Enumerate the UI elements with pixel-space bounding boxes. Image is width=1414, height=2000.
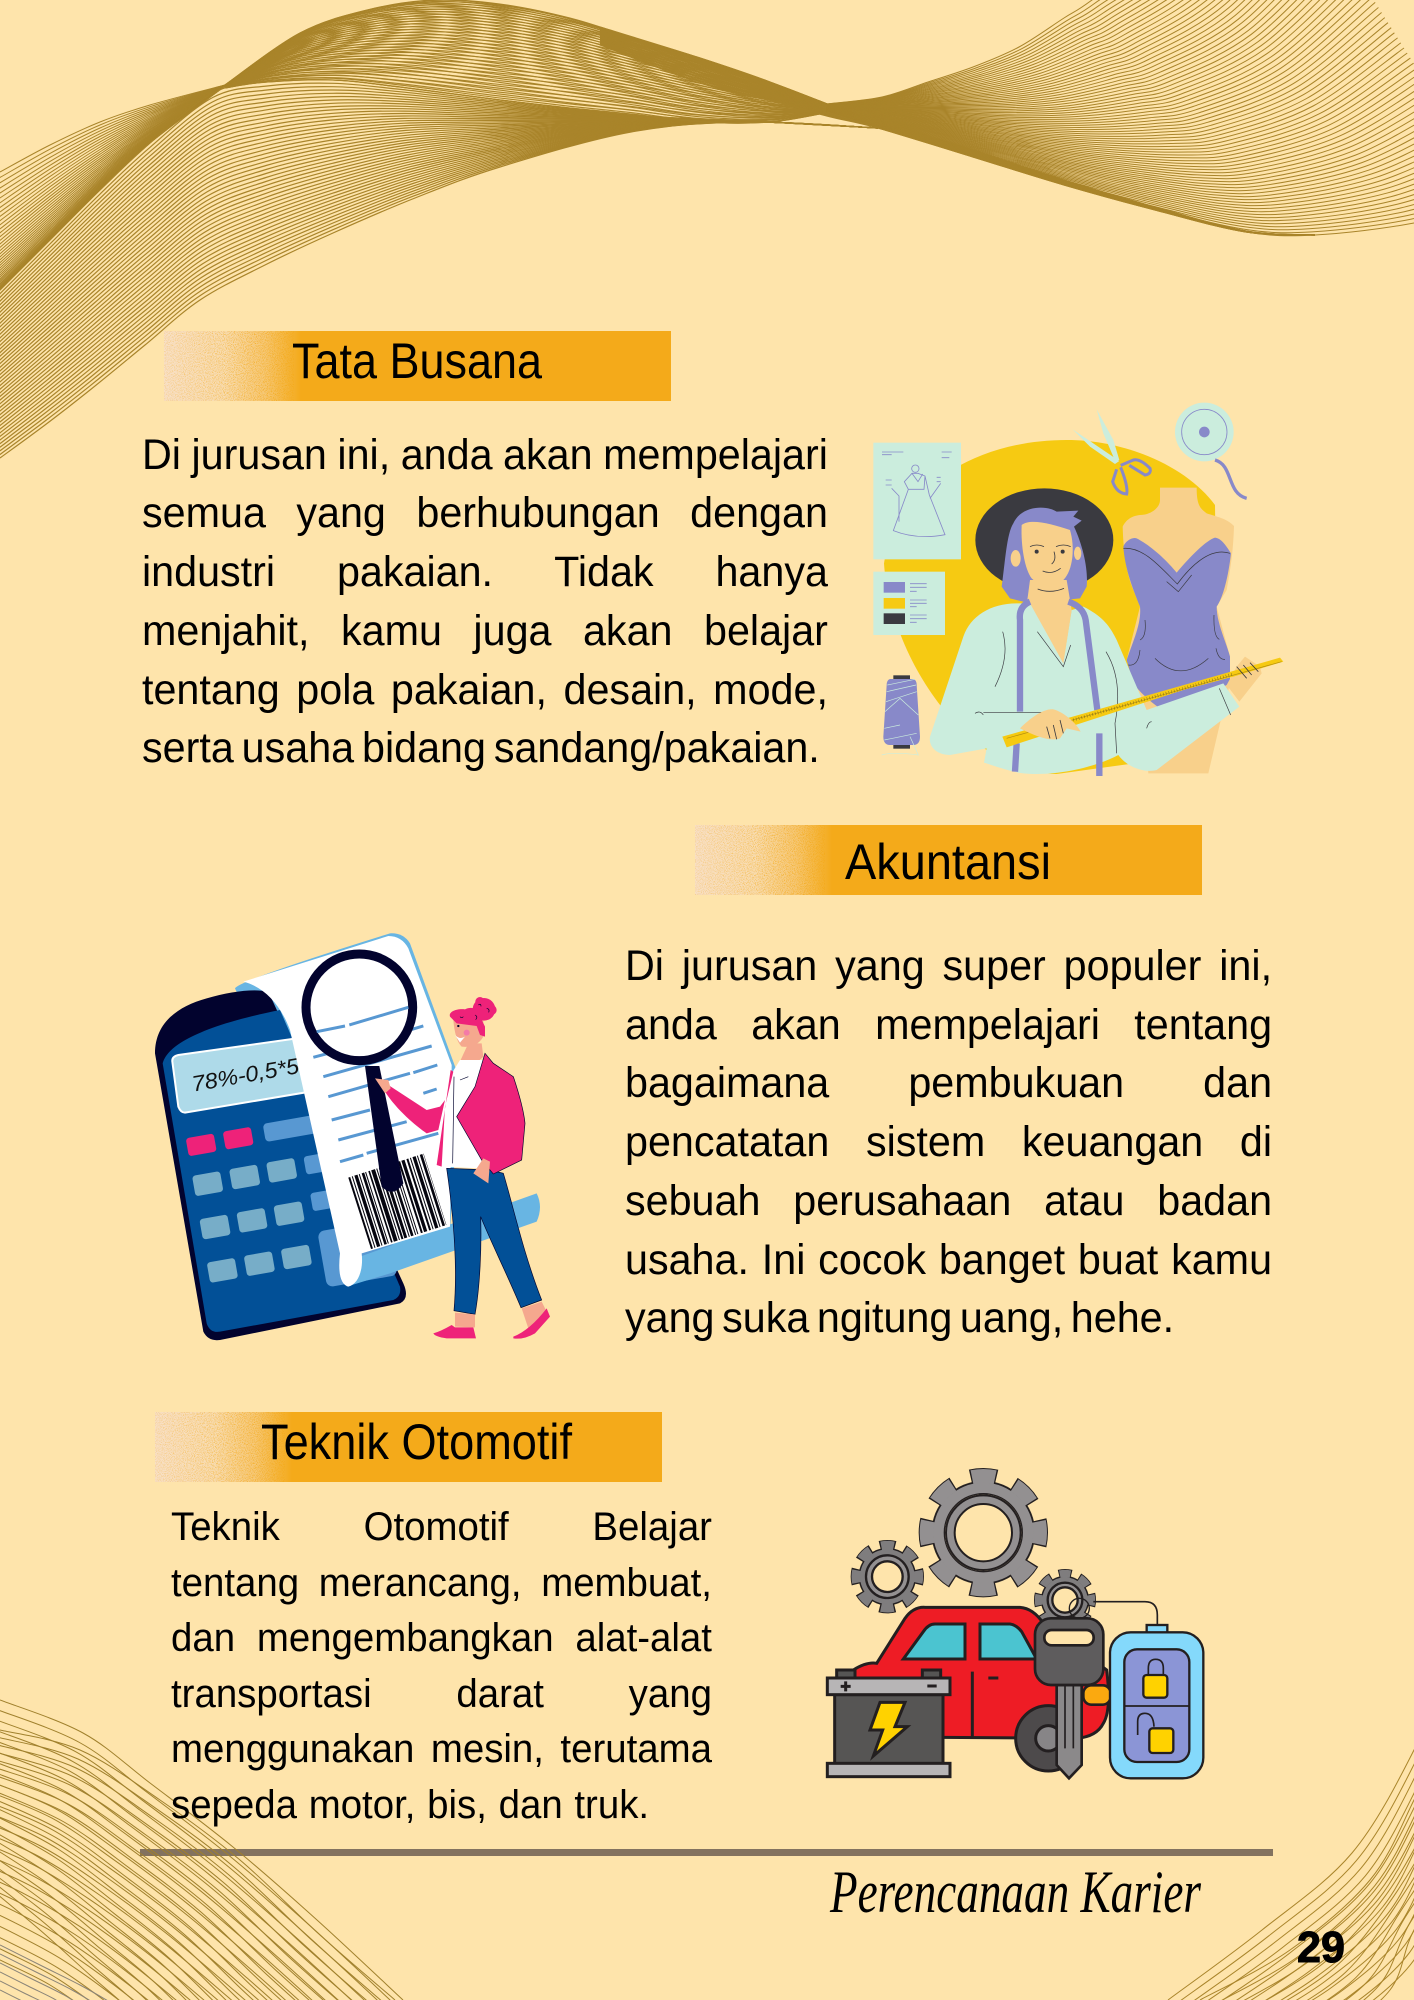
icon: large gear	[927, 1476, 1040, 1589]
text block: Tata Busana description: tentang pola pakaian, desain, mode,	[142, 666, 828, 714]
text block: Teknik Otomotif description: Teknik Otomotif Belajar	[171, 1505, 712, 1549]
icon: right gear	[1039, 1574, 1091, 1626]
footer title: Perencanaan Karier: Perencanaan Karier	[829, 1859, 1201, 1925]
icon: red car	[853, 1607, 1111, 1771]
text block: Akuntansi description: usaha. Ini cocok banget buat kamu	[625, 1236, 1272, 1284]
heading: Teknik Otomotif: Teknik Otomotif	[261, 1414, 572, 1470]
heading: Tata Busana	[164, 331, 671, 401]
icon: car battery	[827, 1670, 950, 1777]
text block: Akuntansi description	[625, 942, 1272, 1342]
text block: Tata Busana description: menjahit, kamu juga akan belajar	[142, 607, 828, 655]
text block: Teknik Otomotif description: tentang merancang, membuat,	[171, 1560, 712, 1604]
illustration: calculator, receipt and woman with magnifier: 78%-0,5*5	[190, 1053, 302, 1097]
text block: Teknik Otomotif description: sepeda motor, bis, dan truk.	[171, 1782, 649, 1826]
heading: Teknik Otomotif	[155, 1412, 662, 1482]
text block: Akuntansi description: bagaimana pembukuan dan	[625, 1059, 1272, 1107]
icon: remote with locks	[1093, 1602, 1203, 1778]
heading: Akuntansi	[695, 825, 1202, 895]
text block: Tata Busana description: industri pakaian. Tidak hanya	[142, 548, 828, 596]
icon: key	[1035, 1598, 1103, 1778]
illustration: car, battery, gears, key and remote	[827, 1476, 1203, 1778]
heading: Tata Busana: Tata Busana	[292, 333, 542, 389]
text block: Tata Busana description: semua yang berhubungan dengan	[142, 489, 828, 537]
text block: Akuntansi description: yang suka ngitung uang, hehe.	[625, 1294, 1174, 1342]
heading: Akuntansi: Akuntansi	[845, 834, 1051, 890]
text block: Tata Busana description	[142, 430, 828, 772]
text block: Teknik Otomotif description: transportasi darat yang	[171, 1672, 712, 1716]
text block: Teknik Otomotif description	[171, 1505, 712, 1826]
icon: left gear	[856, 1545, 919, 1608]
text block: Akuntansi description: anda akan mempelajari tentang	[625, 1001, 1272, 1049]
text block: Akuntansi description: Di jurusan yang super populer ini,	[625, 942, 1272, 990]
divider	[140, 1849, 1273, 1856]
illustration: tailor with mannequin	[873, 403, 1283, 776]
text block: Tata Busana description: Di jurusan ini, anda akan mempelajari	[142, 430, 828, 478]
text block: Teknik Otomotif description: dan mengembangkan alat-alat	[171, 1616, 712, 1660]
text block: Akuntansi description: pencatatan sistem keuangan di	[625, 1118, 1272, 1166]
page number: 29	[1297, 1923, 1345, 1972]
illustration: calculator, receipt and woman with magnifier	[155, 933, 550, 1340]
text block: Tata Busana description: serta usaha bidang sandang/pakaian.	[142, 724, 820, 772]
text block: Teknik Otomotif description: menggunakan mesin, terutama	[171, 1727, 712, 1771]
text block: Akuntansi description: sebuah perusahaan atau badan	[625, 1177, 1272, 1225]
